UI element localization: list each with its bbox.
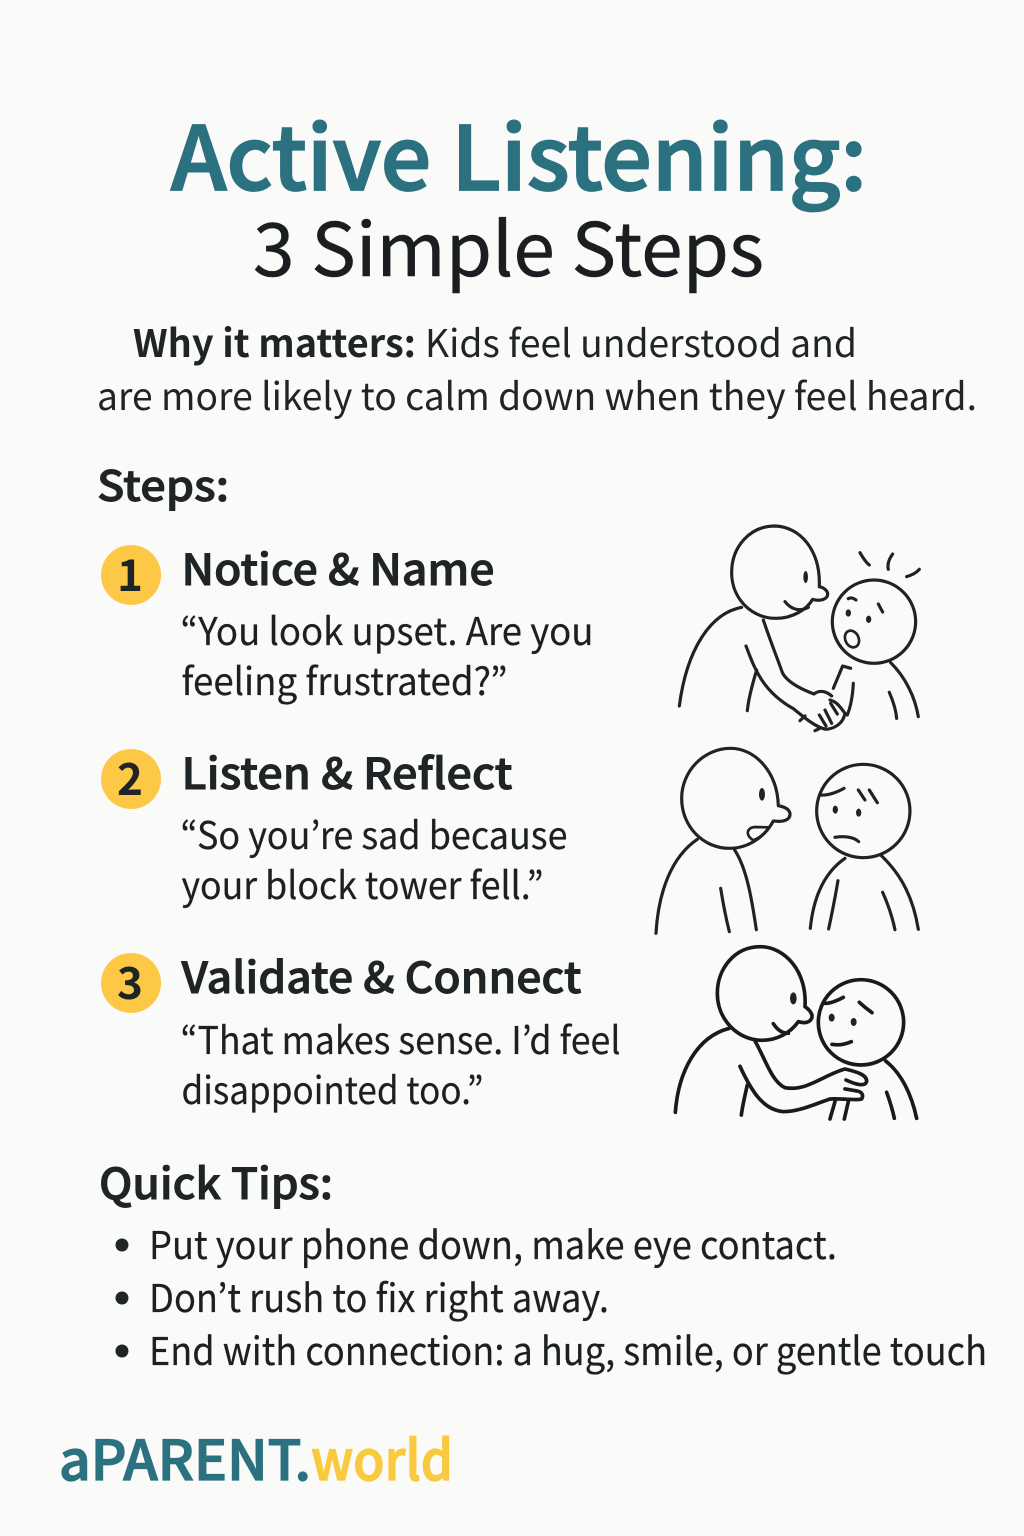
step 1 quote: “You look upset. Are you: [180, 601, 594, 656]
step 2 quote: “So you’re sad because: [180, 805, 568, 860]
number badge 3: 3: [117, 948, 143, 1012]
number badge 3: [101, 948, 161, 1013]
number badge 2: 2: [117, 744, 143, 808]
logo: [59, 1416, 453, 1496]
step 3 quote: “That makes sense. I’d feel: [180, 1010, 620, 1065]
step 2 quote: [180, 805, 568, 910]
quick tips list: Don’t rush to fix right away.: [149, 1268, 609, 1324]
logo: aPARENT.: [59, 1416, 311, 1496]
icon: parent talking to sad child: [656, 748, 918, 933]
steps heading: Steps:: [97, 453, 229, 514]
why it matters text: Why it matters:: [133, 313, 416, 368]
step 1 heading: Notice & Name: [182, 536, 494, 598]
number badge 1: 1: [117, 540, 143, 604]
why it matters text: [97, 313, 977, 421]
logo: world: [311, 1416, 453, 1496]
step 2: [101, 740, 568, 910]
title: Active Listening:: [171, 89, 867, 216]
step 1: [101, 536, 594, 706]
step 3 quote: disappointed too.”: [182, 1060, 484, 1115]
title: 3 Simple Steps: [253, 191, 764, 298]
step 1 quote: feeling frustrated?”: [182, 651, 508, 706]
why it matters text: are more likely to calm down when they feel heard.: [97, 366, 977, 421]
quick tips list: [116, 1215, 987, 1377]
step 3 heading: Validate & Connect: [180, 944, 582, 1006]
number badge 1: [101, 540, 161, 605]
why it matters text: Kids feel understood and: [425, 313, 857, 368]
quick tips list: Put your phone down, make eye contact.: [149, 1215, 837, 1271]
title: [171, 89, 867, 298]
icon: parent hugging child: [675, 947, 917, 1119]
quick tips list: End with connection: a hug, smile, or gentle touch: [149, 1321, 987, 1377]
step 1 quote: [180, 601, 594, 706]
step 3 quote: [180, 1010, 620, 1115]
step 3: [101, 944, 620, 1115]
quick tips heading: Quick Tips:: [99, 1150, 333, 1212]
step 2 quote: your block tower fell.”: [182, 855, 544, 910]
icon: parent comforting upset child: [679, 526, 919, 731]
number badge 2: [101, 744, 161, 809]
step 2 heading: Listen & Reflect: [182, 740, 512, 802]
